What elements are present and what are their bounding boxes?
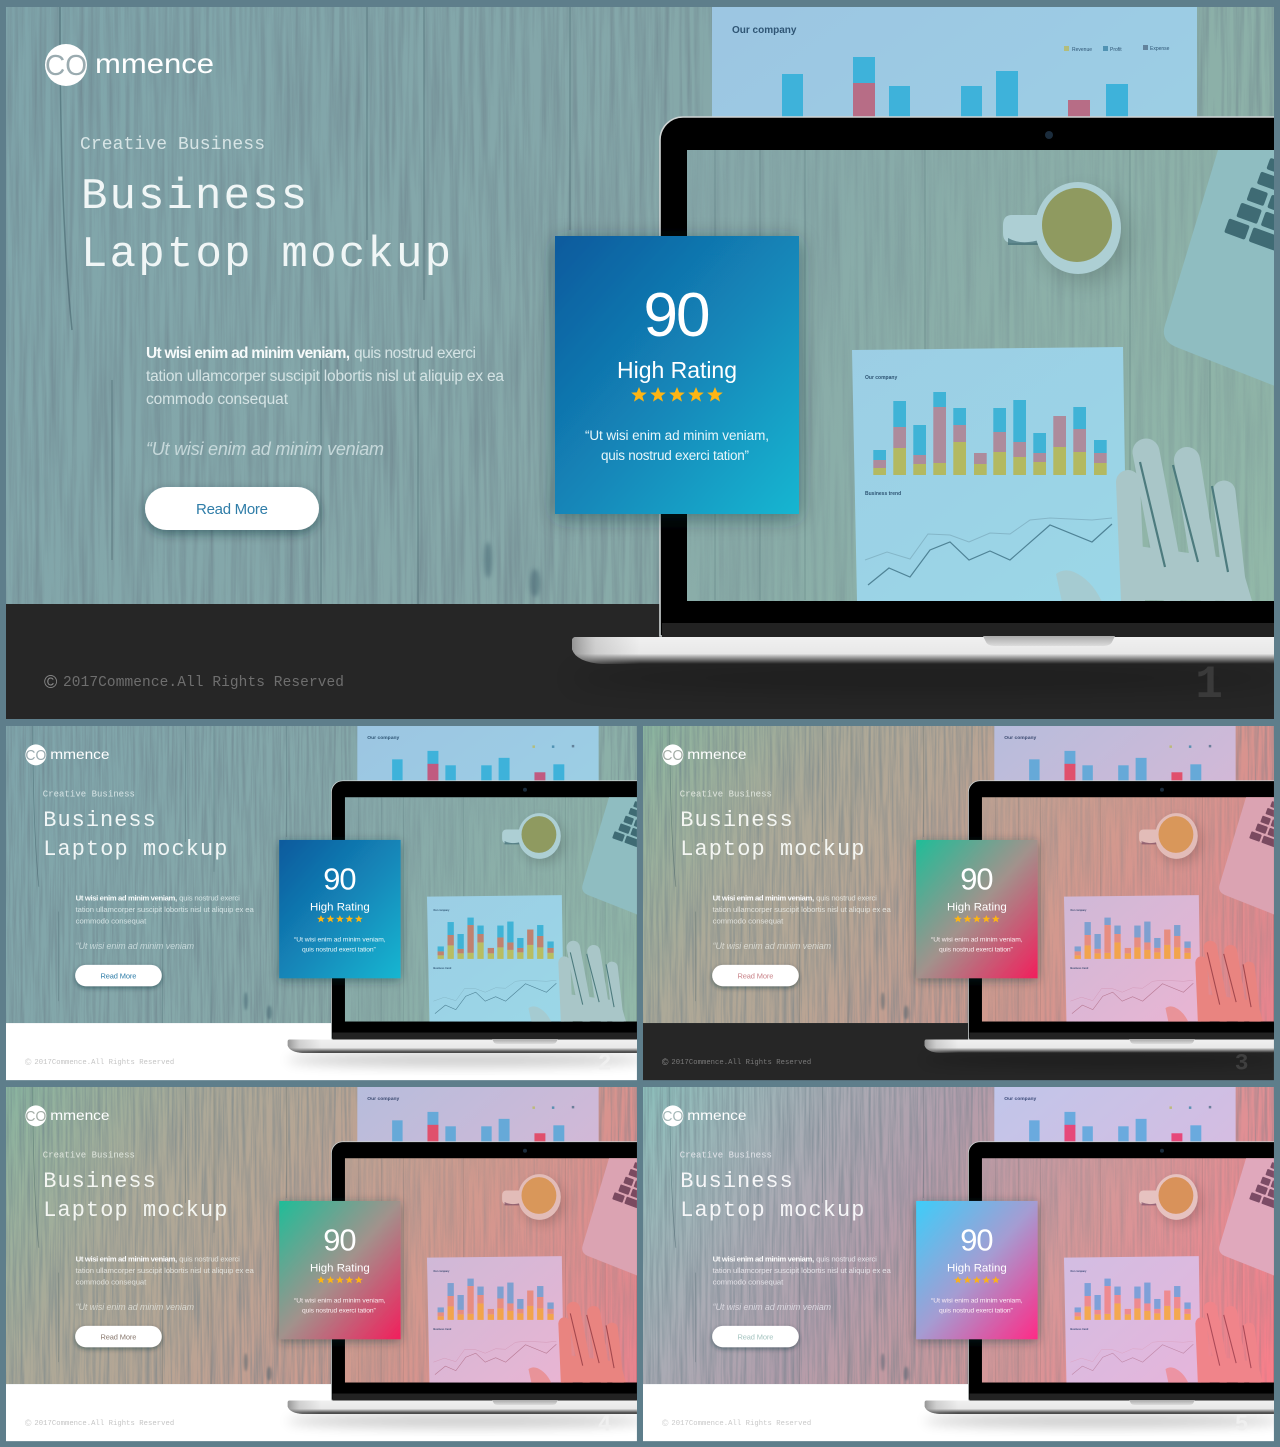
body text [713,894,892,951]
rating card: “Ut wisi enim ad minim veniam, [585,428,769,443]
rating card: 90 [960,1223,994,1258]
body text: Ut wisi enim ad minim veniam, [713,894,814,903]
chart labels on papers [1004,1096,1089,1331]
heading: Creative Business [43,790,135,800]
logo: CO [662,748,683,764]
chart labels on papers: Profit [1110,47,1122,53]
heading: Laptop mockup [680,1198,864,1223]
read more button [712,1326,799,1347]
body text: commodo consequat [146,391,289,408]
logo [662,744,747,765]
read more button [75,965,162,986]
rating card: 90 [960,862,994,897]
logo: CO [662,1109,683,1125]
logo [662,1105,747,1126]
chart labels on papers: Expense [1150,46,1170,52]
chart labels on papers: Business trend [1070,967,1089,970]
footer copyright: 2017Commence.All Rights Reserved [63,675,344,691]
read more button [75,1326,162,1347]
read more button [145,487,319,530]
chart labels on papers: Our company [367,1096,400,1102]
rating card: quis nostrud exerci tation” [939,946,1013,953]
footer copyright: © [662,1418,669,1428]
rating card: quis nostrud exerci tation” [601,448,749,463]
rating card: “Ut wisi enim ad minim veniam, [294,936,386,943]
panel: small slide 5, cyan-pink theme with white footer [643,1087,1280,1441]
five stars [954,1276,1000,1283]
body text: quis nostrud exerci [816,1255,877,1264]
chart labels on papers [367,735,452,970]
page number: 4 [598,1411,612,1437]
body text: commodo consequat [713,917,784,926]
rating card: “Ut wisi enim ad minim veniam, [294,1297,386,1304]
heading [680,790,864,862]
logo: mmence [687,746,747,762]
read more button: Read More [101,971,136,980]
heading: Laptop mockup [43,1198,227,1223]
logo: CO [45,50,87,82]
heading: Laptop mockup [680,837,864,862]
rating card: 90 [323,1223,357,1258]
logo: mmence [687,1107,747,1123]
chart labels on papers [367,1096,452,1331]
five stars [317,915,363,922]
five stars [317,1276,363,1283]
body text: commodo consequat [713,1278,784,1287]
heading: Business [680,808,793,833]
body text: commodo consequat [76,917,147,926]
chart labels on papers: Our company [1004,1096,1037,1102]
body text: tation ullamcorper suscipit lobortis nisl ut aliquip ex ea [76,905,255,914]
laptop mockup on wood background [6,726,655,1080]
chart labels on papers: Our company [433,1270,450,1273]
logo: mmence [95,48,214,79]
rating card [279,1201,401,1339]
body text [146,345,504,459]
chart labels on papers: Our company [433,909,450,912]
body text: “Ut wisi enim ad minim veniam [76,1302,195,1312]
body text: quis nostrud exerci [354,345,476,362]
heading [80,135,451,280]
rating card: “Ut wisi enim ad minim veniam, [931,936,1023,943]
footer copyright: © [662,1057,669,1067]
body text: Ut wisi enim ad minim veniam, [76,894,177,903]
panel: small slide 2, blue theme with white footer [6,726,655,1080]
rating card [916,1201,1038,1339]
panel: small slide 3, green-red theme with dark footer [643,726,1280,1080]
read more button: Read More [196,501,268,518]
heading [680,1151,864,1223]
heading: Business [43,1169,156,1194]
logo: mmence [50,746,110,762]
read more button [712,965,799,986]
chart labels on papers [1004,735,1089,970]
chart labels on papers: Business trend [1070,1328,1089,1331]
rating card: High Rating [617,357,737,383]
heading: Creative Business [80,135,265,155]
chart labels on papers: Business trend [433,967,452,970]
heading: Business [680,1169,793,1194]
chart labels on papers: Our company [1070,909,1087,912]
rating card: quis nostrud exerci tation” [939,1307,1013,1314]
rating card [555,236,799,514]
read more button: Read More [101,1332,136,1341]
rating card [279,840,401,978]
heading: Laptop mockup [81,230,451,280]
heading: Creative Business [680,1151,772,1161]
footer copyright: 2017Commence.All Rights Reserved [671,1059,811,1067]
body text: “Ut wisi enim ad minim veniam [76,941,195,951]
chart labels on papers: Our company [1070,1270,1087,1273]
body text: tation ullamcorper suscipit lobortis nisl ut aliquip ex ea [76,1266,255,1275]
body text: Ut wisi enim ad minim veniam, [146,345,350,362]
rating card: High Rating [310,902,370,914]
logo [25,744,110,765]
heading: Business [43,808,156,833]
body text: tation ullamcorper suscipit lobortis nisl ut aliquip ex ea [146,368,504,385]
laptop mockup on wood background [6,7,1280,719]
rating card: 90 [644,281,710,350]
logo: CO [25,1109,46,1125]
page number: 1 [1195,659,1223,711]
rating card: 90 [323,862,357,897]
rating card: High Rating [947,902,1007,914]
laptop mockup on wood background [643,726,1280,1080]
laptop mockup on wood background [643,1087,1280,1441]
rating card: “Ut wisi enim ad minim veniam, [931,1297,1023,1304]
chart labels on papers [732,25,1170,497]
heading: Creative Business [680,790,772,800]
body text [76,894,255,951]
body text: “Ut wisi enim ad minim veniam [713,1302,832,1312]
footer copyright: 2017Commence.All Rights Reserved [671,1420,811,1428]
heading [43,790,227,862]
body text: “Ut wisi enim ad minim veniam [146,439,384,459]
chart labels on papers: Our company [367,735,400,741]
chart labels on papers: Our company [732,25,797,36]
body text: tation ullamcorper suscipit lobortis nisl ut aliquip ex ea [713,1266,892,1275]
chart labels on papers: Revenue [1072,47,1092,53]
page number: 3 [1235,1050,1248,1076]
logo [25,1105,110,1126]
heading: Creative Business [43,1151,135,1161]
chart labels on papers: Our company [1004,735,1037,741]
heading: Laptop mockup [43,837,227,862]
laptop mockup on wood background [6,1087,655,1441]
body text: quis nostrud exerci [179,894,240,903]
footer copyright: 2017Commence.All Rights Reserved [34,1420,174,1428]
body text: Ut wisi enim ad minim veniam, [713,1255,814,1264]
rating card [916,840,1038,978]
body text: Ut wisi enim ad minim veniam, [76,1255,177,1264]
body text: commodo consequat [76,1278,147,1287]
rating card: quis nostrud exerci tation” [302,946,376,953]
rating card: quis nostrud exerci tation” [302,1307,376,1314]
chart labels on papers: Business trend [865,491,901,497]
body text: quis nostrud exerci [179,1255,240,1264]
footer copyright: 2017Commence.All Rights Reserved [34,1059,174,1067]
read more button: Read More [738,1332,773,1341]
body text: tation ullamcorper suscipit lobortis nisl ut aliquip ex ea [713,905,892,914]
five stars [954,915,1000,922]
rating card: High Rating [310,1263,370,1275]
body text: quis nostrud exerci [816,894,877,903]
chart labels on papers: Our company [865,375,897,381]
body text: “Ut wisi enim ad minim veniam [713,941,832,951]
body text [713,1255,892,1312]
panel: main slide, blue theme [6,7,1280,719]
page number: 5 [1235,1411,1248,1437]
panel: small slide 4, green-red theme with white footer [6,1087,655,1441]
heading [43,1151,227,1223]
footer copyright: © [25,1057,32,1067]
heading: Business [81,172,307,222]
body text [76,1255,255,1312]
logo [45,44,214,86]
logo: CO [25,748,46,764]
read more button: Read More [738,971,773,980]
five stars [631,387,723,402]
chart labels on papers: Business trend [433,1328,452,1331]
footer copyright: © [44,672,57,692]
logo: mmence [50,1107,110,1123]
rating card: High Rating [947,1263,1007,1275]
footer copyright: © [25,1418,32,1428]
page number: 2 [598,1050,611,1076]
